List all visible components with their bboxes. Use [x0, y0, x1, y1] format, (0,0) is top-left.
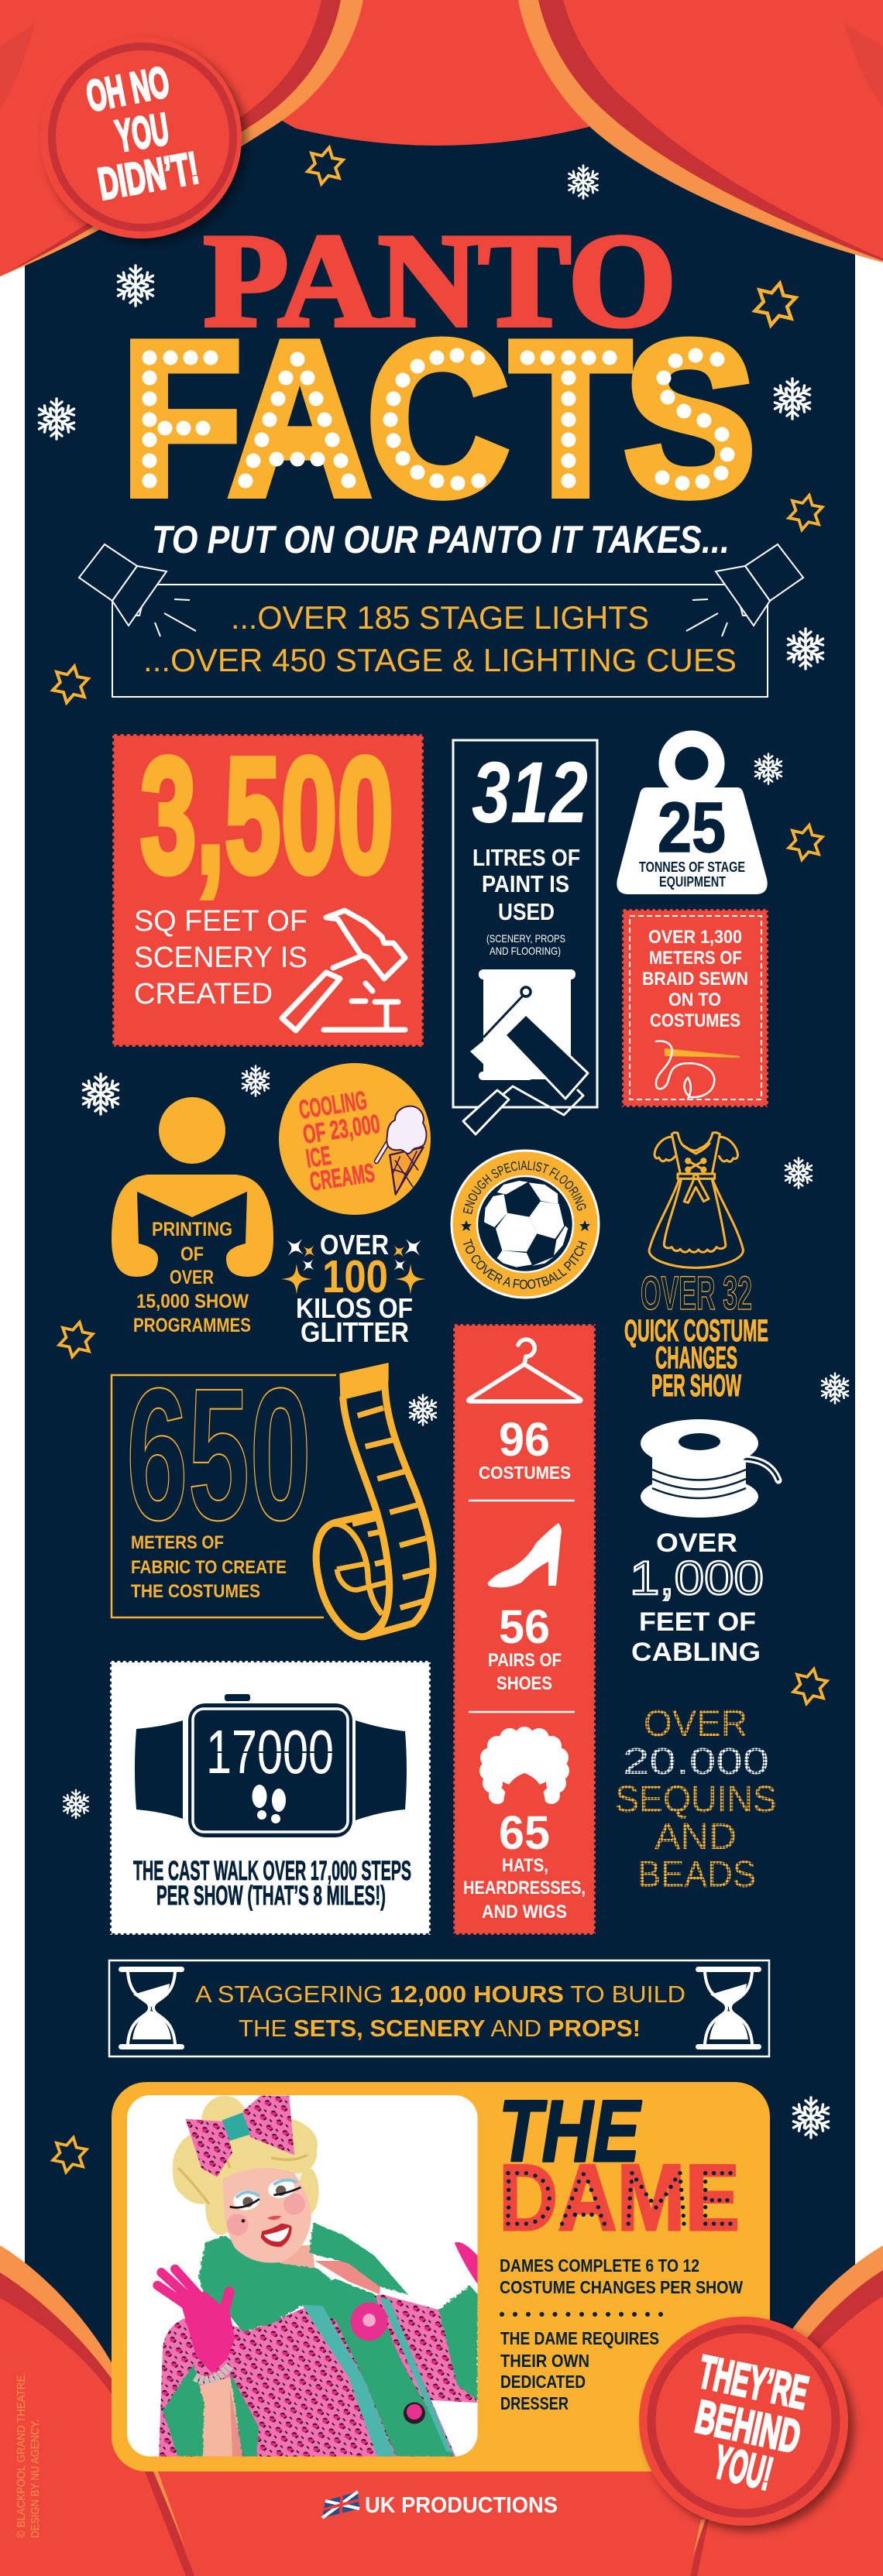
dame bulbs: [506, 2171, 733, 2226]
icon: ice cream cone: [376, 1106, 426, 1195]
icon: wig: [479, 1727, 569, 1806]
text: the dame requires a dresser: THEIR OWN: [500, 2351, 589, 2371]
icon and text: 25 tonnes weight: EQUIPMENT: [659, 874, 726, 890]
text: over 20.000 sequins and beads: [615, 1703, 777, 1895]
hair: [173, 2096, 319, 2235]
caption: LITRES OF: [472, 844, 580, 871]
panel: 3,500 sq feet of scenery: [112, 723, 424, 1047]
caption: [133, 1856, 411, 1911]
photo: the dame: [127, 2095, 478, 2460]
panel: 17,000 steps: [110, 1661, 431, 1935]
text: over 32 quick costume changes: PER SHOW: [651, 1369, 741, 1403]
icon: dress: [649, 1133, 743, 1267]
text: over 20.000 sequins and beads: BEADS: [637, 1854, 756, 1895]
icon: left hourglass: [119, 1967, 184, 2049]
icon and text: 23,000 ice creams: OF 23,000: [301, 1110, 382, 1150]
bottom curtains: [0, 2245, 883, 2576]
text: over 20.000 sequins and beads: AND: [655, 1816, 737, 1857]
face: [223, 2168, 311, 2263]
panel: the dame: [112, 2082, 770, 2471]
text: over 32 quick costume changes: [624, 1267, 768, 1403]
text: 65 hats headdresses and wigs: HEARDRESSES,: [463, 1878, 586, 1899]
caption: [134, 905, 308, 1010]
icon: flag: [322, 2492, 359, 2518]
text: over 32 quick costume changes: OVER 32: [641, 1267, 752, 1319]
text: over 20.000 sequins and beads: OVER: [644, 1703, 747, 1744]
badge: oh no you didn't: DIDN’T!: [94, 142, 202, 210]
logo: uk productions: UK PRODUCTIONS: [365, 2493, 558, 2518]
icon: right hourglass: [696, 1967, 761, 2049]
digital step count: 17000: [206, 1717, 334, 1786]
text: dames complete costume changes: [500, 2255, 743, 2297]
icon: right spotlight: [686, 544, 803, 636]
decorative stars: [51, 144, 829, 2175]
text: 56 pairs of shoes: SHOES: [496, 1673, 552, 1694]
icon and text: 25 tonnes weight: TONNES OF STAGE: [639, 859, 745, 875]
caption: THE COSTUMES: [131, 1581, 260, 1602]
icon and text: 25 tonnes weight: [617, 739, 768, 894]
caption: BRAID SEWN: [642, 969, 748, 990]
caption: COSTUMES: [650, 1010, 740, 1031]
text: the dame requires a dresser: THE DAME REQUIRES: [500, 2328, 659, 2348]
dividers: [469, 1501, 575, 1712]
text: 100 kilos of glitter: [280, 1229, 428, 1348]
number: 650: [126, 1350, 311, 1559]
text: 65 hats headdresses and wigs: [463, 1806, 586, 1923]
dotted separator: [500, 2312, 663, 2317]
text: over 1,000 feet of cabling: OVER: [656, 1528, 737, 1558]
small note: AND FLOORING): [490, 945, 561, 957]
icon and text: printing programmes reader: OVER: [170, 1267, 214, 1288]
tagline: TO PUT ON OUR PANTO IT TAKES...: [152, 518, 730, 561]
icon: hanger: [469, 1339, 581, 1401]
forearm: [200, 2377, 239, 2456]
mouth: [261, 2224, 292, 2247]
icon: star marks: [461, 1220, 590, 1231]
text: 65 hats headdresses and wigs: HATS,: [502, 1855, 548, 1876]
text: 100 kilos of glitter: 100: [322, 1251, 388, 1302]
sequin strip: [302, 2305, 395, 2457]
caption: SQ FEET OF: [134, 905, 308, 938]
badge: they're behind you: BEHIND: [691, 2390, 805, 2463]
icon: smart watch: [135, 1694, 407, 1837]
caption: PAINT IS: [482, 870, 569, 897]
icon and text: printing programmes reader: PRINTING: [152, 1219, 232, 1240]
text: over 20.000 sequins and beads: SEQUINS: [615, 1779, 777, 1820]
text: over 1,000 feet of cabling: FEET OF: [639, 1607, 756, 1637]
text: the dame requires a dresser: [500, 2328, 659, 2413]
badge: oh no you didn't: YOU: [112, 104, 172, 162]
caption: CREATED: [134, 978, 273, 1010]
text: 100 kilos of glitter: OVER: [320, 1229, 389, 1261]
panel: 650 meters of fabric: [112, 1350, 433, 1637]
text: 56 pairs of shoes: PAIRS OF: [488, 1650, 562, 1671]
marquee bulbs: [143, 348, 734, 491]
neck: [279, 2245, 314, 2269]
icon: left spotlight: [79, 544, 196, 636]
caption: USED: [498, 898, 555, 925]
collar lining: [315, 2261, 382, 2294]
icon and text: 23,000 ice creams: [279, 1063, 431, 1215]
caption: ON TO: [668, 990, 721, 1010]
banner text line 2: THE SETS, SCENERY AND PROPS!: [239, 2015, 641, 2042]
icon and text: 25 tonnes weight: 25: [658, 788, 726, 867]
banner text line 1: A STAGGERING 12,000 HOURS TO BUILD: [195, 1981, 685, 2008]
badge: oh no you didn't: [40, 37, 242, 238]
text: 65 hats headdresses and wigs: 65: [499, 1806, 550, 1859]
text: stage lights: ...OVER 185 STAGE LIGHTS: [231, 599, 649, 636]
badge: oh no you didn't: OH NO: [82, 57, 173, 121]
decorative snowflakes: [36, 166, 850, 2138]
icon and text: 23,000 ice creams: ICE: [304, 1141, 333, 1174]
coat: [159, 2294, 478, 2460]
right glove: [455, 2242, 478, 2284]
text: over 1,000 feet of cabling: [630, 1528, 764, 1667]
icon: high heel: [488, 1523, 562, 1587]
icon and text: printing programmes reader: PROGRAMMES: [133, 1315, 251, 1336]
text: dames complete costume changes: COSTUME CHANGES PER SHOW: [500, 2277, 743, 2297]
icon and text: 23,000 ice creams: COOLING: [297, 1086, 369, 1125]
text: over 1,000 feet of cabling: 1,000: [630, 1552, 764, 1604]
text: dames complete costume changes: DAMES COMPLETE 6 TO 12: [500, 2255, 699, 2276]
curved text: enough specialist flooring: ENOUGH SPECIALIST FLOORING: [463, 1161, 586, 1214]
buttons: [350, 2302, 388, 2341]
digit segment gaps: [203, 1751, 337, 1753]
caption: FABRIC TO CREATE: [131, 1557, 287, 1578]
text: 100 kilos of glitter: KILOS OF: [296, 1292, 413, 1324]
curved text: to cover a football pitch: TO COVER A FOOTBALL PITCH: [463, 1239, 587, 1289]
icon and text: printing programmes reader: [112, 1097, 273, 1336]
credit text: [15, 2372, 42, 2538]
text: 96 costumes: 96: [499, 1413, 550, 1466]
number: 312: [472, 744, 588, 841]
text: 96 costumes: COSTUMES: [479, 1463, 571, 1483]
panel: costumes, shoes, hats: [453, 1324, 596, 1935]
panel: 1,300 meters of braid: [622, 909, 768, 1107]
text: the dame requires a dresser: DEDICATED: [500, 2372, 586, 2392]
badge: they're behind you: [639, 2317, 848, 2526]
icon: footprints: [253, 1785, 286, 1823]
icon: needle and thread: [656, 1041, 740, 1099]
fur collar and trim: [163, 2222, 478, 2457]
icon: tape measure: [316, 1363, 433, 1637]
icon and text: 23,000 ice creams: CREAMS: [308, 1158, 376, 1197]
panel: stage lights: [79, 544, 803, 697]
icon and text: printing programmes reader: OF: [180, 1243, 204, 1265]
caption: METERS OF: [649, 948, 742, 969]
small note: (SCENERY, PROPS: [486, 932, 565, 945]
heading: dame: DAME: [499, 2145, 740, 2250]
caption: PER SHOW (THAT’S 8 MILES!): [156, 1881, 386, 1911]
icon: cable spool: [641, 1419, 778, 1518]
icon: paint can and roller: [463, 969, 588, 1134]
left glove: [157, 2269, 229, 2315]
caption: SCENERY IS: [134, 942, 308, 974]
text: the dame requires a dresser: DRESSER: [500, 2393, 569, 2413]
text: over 32 quick costume changes: QUICK COSTUME: [624, 1314, 768, 1348]
text: over 32 quick costume changes: CHANGES: [655, 1341, 737, 1375]
credit text: © BLACKPOOL GRAND THEATRE.: [15, 2372, 28, 2538]
bow: [185, 2119, 232, 2177]
icon and text: printing programmes reader: 15,000 SHOW: [136, 1291, 249, 1312]
credit text: DESIGN BY NU AGENCY.: [29, 2420, 42, 2538]
caption: [642, 927, 748, 1031]
text: over 20.000 sequins and beads: 20.000: [623, 1741, 769, 1782]
text: 100 kilos of glitter: GLITTER: [301, 1316, 409, 1348]
caption: [472, 844, 580, 925]
badge: they're behind you: YOU!: [709, 2436, 778, 2500]
eye makeup: [233, 2190, 260, 2210]
top curtains: [0, 0, 883, 276]
caption: [131, 1532, 287, 1602]
number: 3,500: [140, 723, 393, 907]
caption: THE CAST WALK OVER 17,000 STEPS: [133, 1856, 411, 1886]
text: 65 hats headdresses and wigs: AND WIGS: [482, 1902, 567, 1923]
caption: OVER 1,300: [648, 927, 742, 948]
icon: sparkles: [280, 1232, 428, 1295]
heading: the: THE: [499, 2083, 642, 2180]
text: 96 costumes: [479, 1413, 571, 1483]
bracelet: [195, 2365, 230, 2380]
title: panto: PANTO: [204, 208, 676, 355]
text: over 1,000 feet of cabling: CABLING: [631, 1638, 761, 1667]
icon: football: [484, 1181, 568, 1267]
panel: 312 litres of paint: [453, 740, 597, 1134]
banner: 12,000 hours: [109, 1960, 769, 2056]
text: lighting cues: ...OVER 450 STAGE & LIGHTING CUES: [143, 642, 737, 678]
text: 56 pairs of shoes: [488, 1600, 562, 1694]
caption: METERS OF: [131, 1532, 224, 1553]
small note: [486, 932, 565, 957]
title: facts marquee: FACTS: [122, 298, 754, 540]
icon: hammer: [282, 911, 405, 1031]
badge: football pitch flooring: [451, 1149, 600, 1299]
text: 56 pairs of shoes: 56: [499, 1600, 550, 1653]
